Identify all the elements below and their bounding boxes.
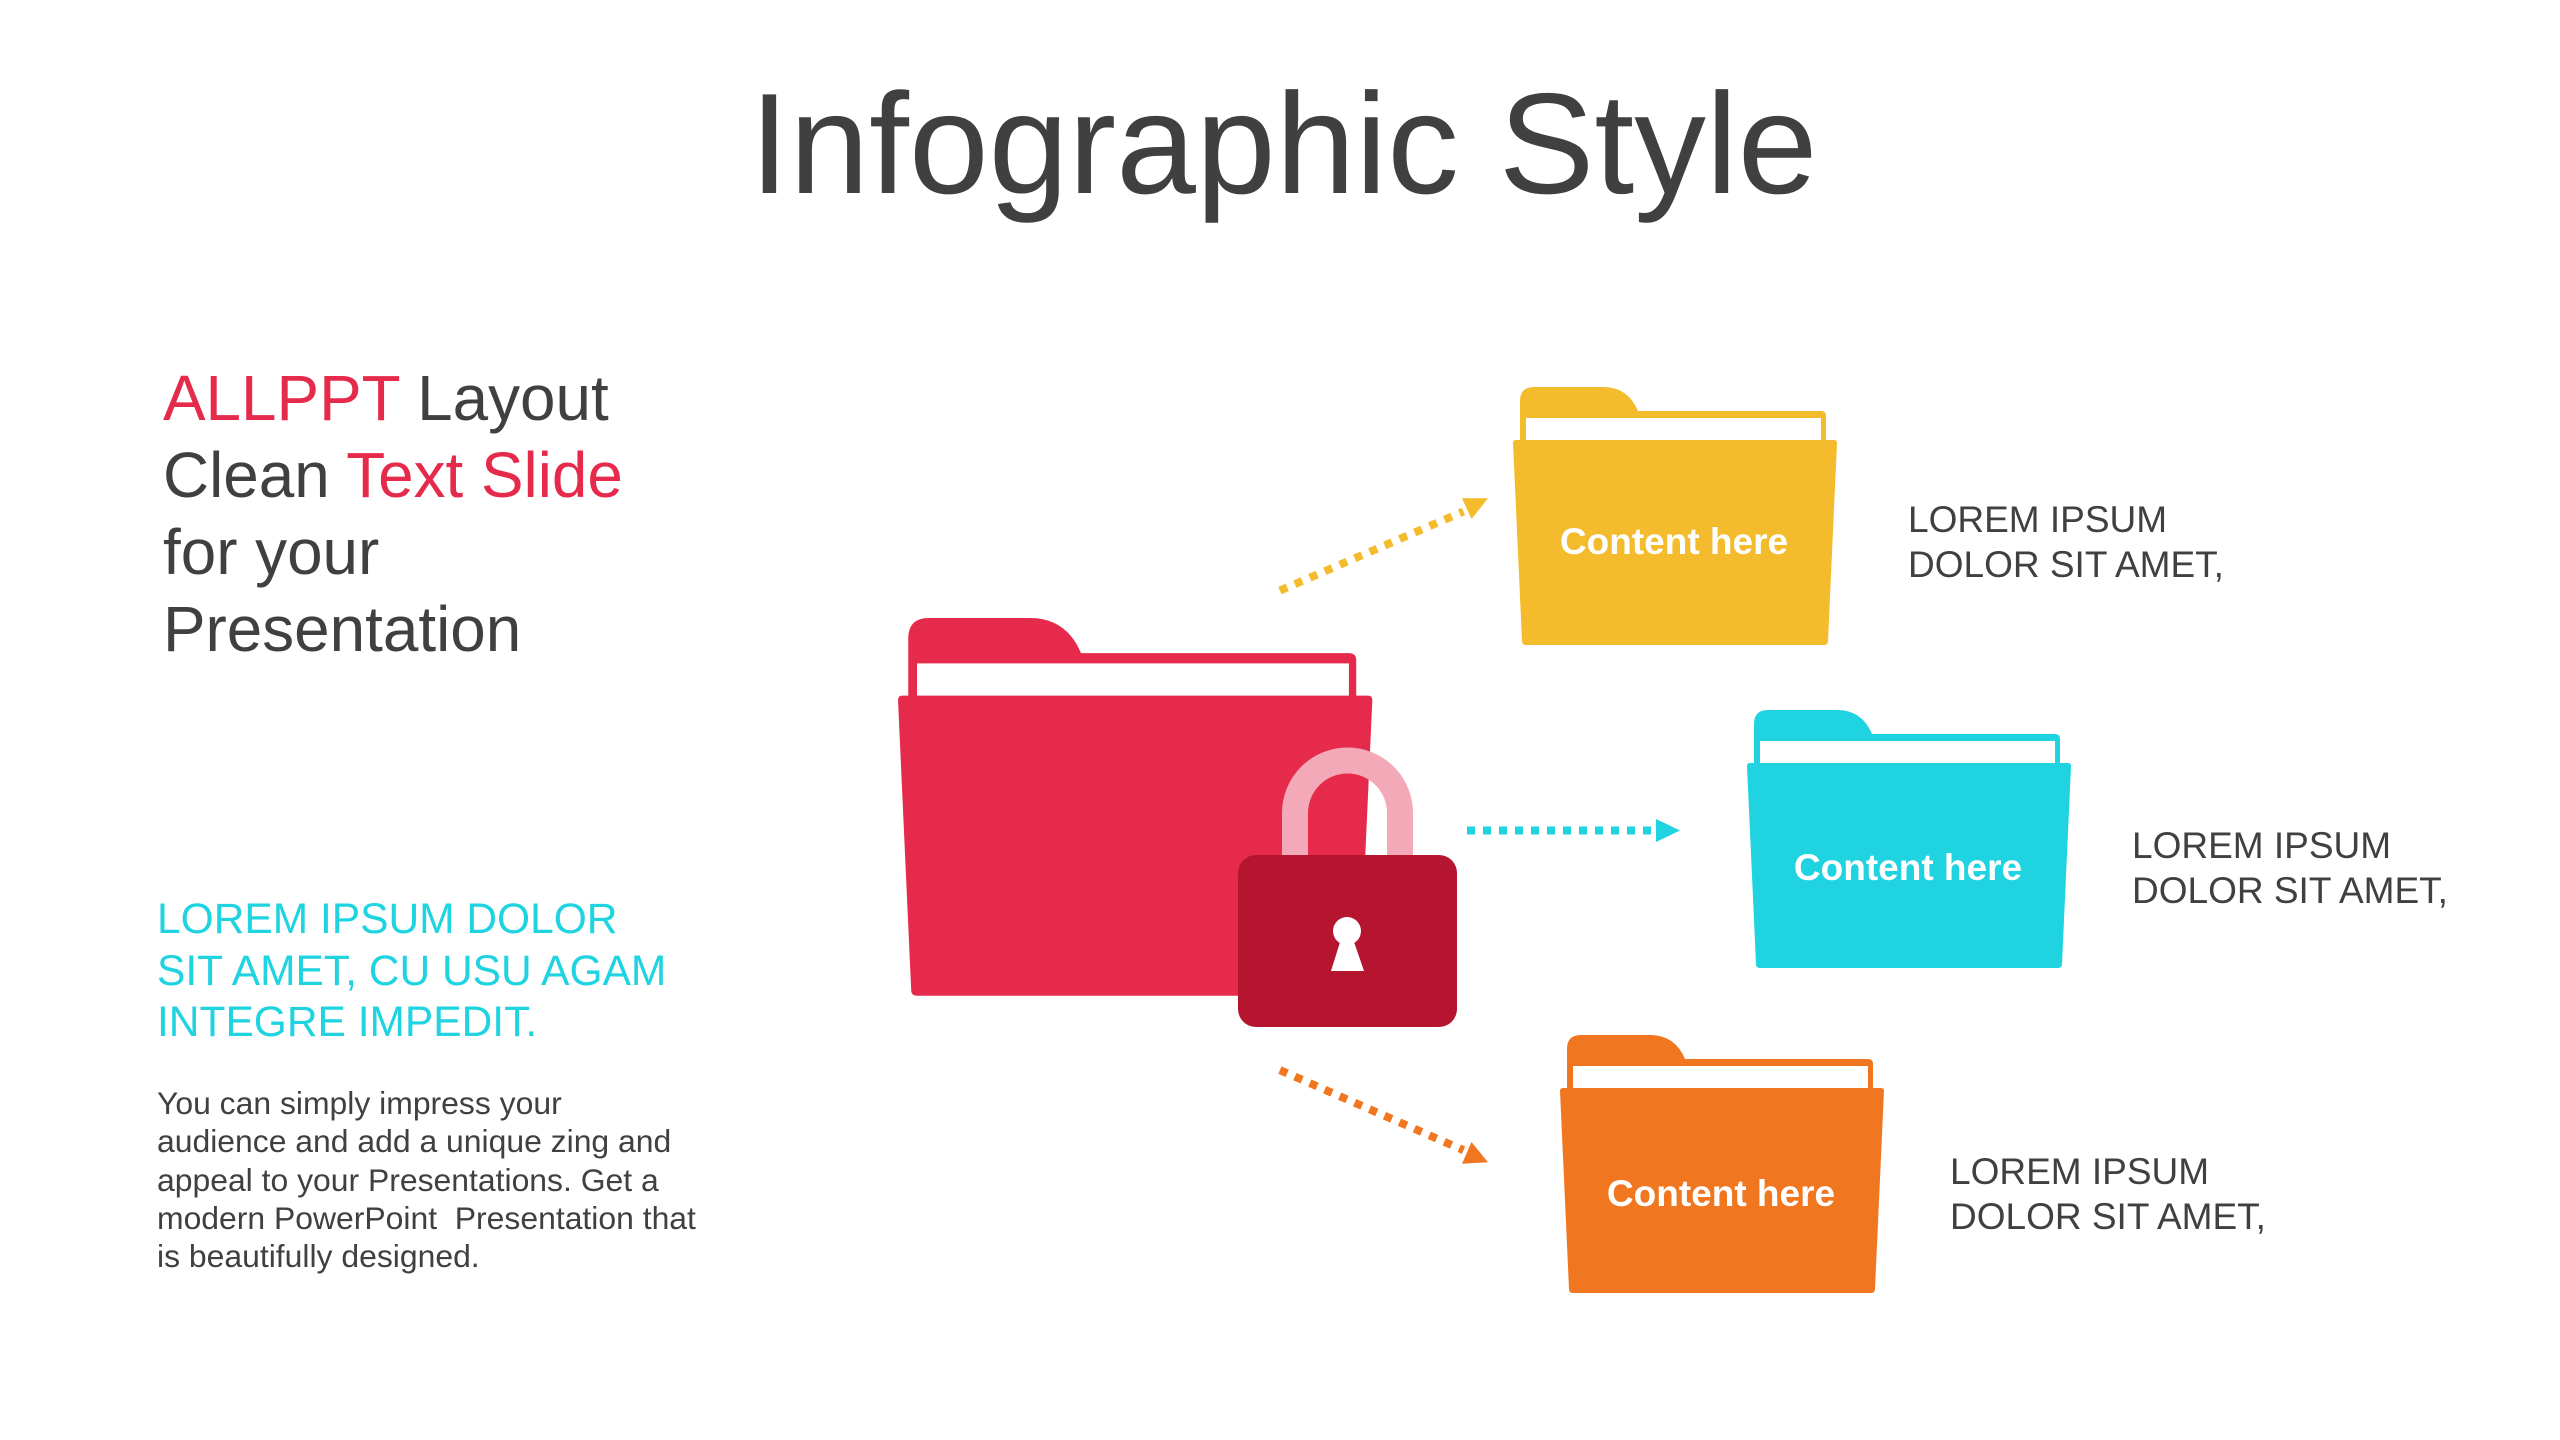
subheading: cyan text: INTEGRE IMPEDIT.	[157, 999, 537, 1046]
arrow: to yellow folder	[1280, 498, 1488, 591]
body text block	[157, 1085, 696, 1274]
heading: layout text: ALLPPT Layout	[163, 362, 609, 434]
orange folder label: DOLOR SIT AMET,	[1950, 1196, 2266, 1237]
icon: padlock	[1238, 761, 1457, 1027]
title: Infographic Style	[750, 64, 1817, 224]
body text block: is beautifully designed.	[157, 1238, 480, 1274]
cyan folder label	[2132, 825, 2448, 911]
orange folder label: LOREM IPSUM	[1950, 1151, 2209, 1192]
body text block: appeal to your Presentations. Get a	[157, 1162, 659, 1198]
orange folder label	[1950, 1151, 2266, 1237]
yellow folder	[1513, 387, 1837, 645]
cyan folder label: DOLOR SIT AMET,	[2132, 870, 2448, 911]
heading: layout text: for your	[163, 516, 379, 588]
cyan folder: Content here	[1794, 847, 2022, 888]
arrow: to orange folder	[1280, 1070, 1488, 1164]
subheading: cyan text	[157, 896, 666, 1046]
red folder	[898, 618, 1372, 996]
cyan folder label: LOREM IPSUM	[2132, 825, 2391, 866]
orange folder	[1560, 1035, 1884, 1293]
subheading: cyan text: SIT AMET, CU USU AGAM	[157, 948, 666, 995]
heading: layout text: Clean Text Slide	[163, 439, 623, 511]
yellow folder label: DOLOR SIT AMET,	[1908, 544, 2224, 585]
heading: layout text	[163, 362, 623, 665]
body text block: modern PowerPoint Presentation that	[157, 1200, 696, 1236]
orange folder: Content here	[1607, 1173, 1835, 1214]
cyan folder	[1747, 710, 2071, 968]
yellow folder: Content here	[1560, 521, 1788, 562]
subheading: cyan text: LOREM IPSUM DOLOR	[157, 896, 618, 943]
yellow folder label	[1908, 499, 2224, 585]
arrow: to cyan folder	[1467, 819, 1680, 842]
body text block: audience and add a unique zing and	[157, 1123, 671, 1159]
heading: layout text: Presentation	[163, 593, 521, 665]
yellow folder label: LOREM IPSUM	[1908, 499, 2167, 540]
body text block: You can simply impress your	[157, 1085, 562, 1121]
